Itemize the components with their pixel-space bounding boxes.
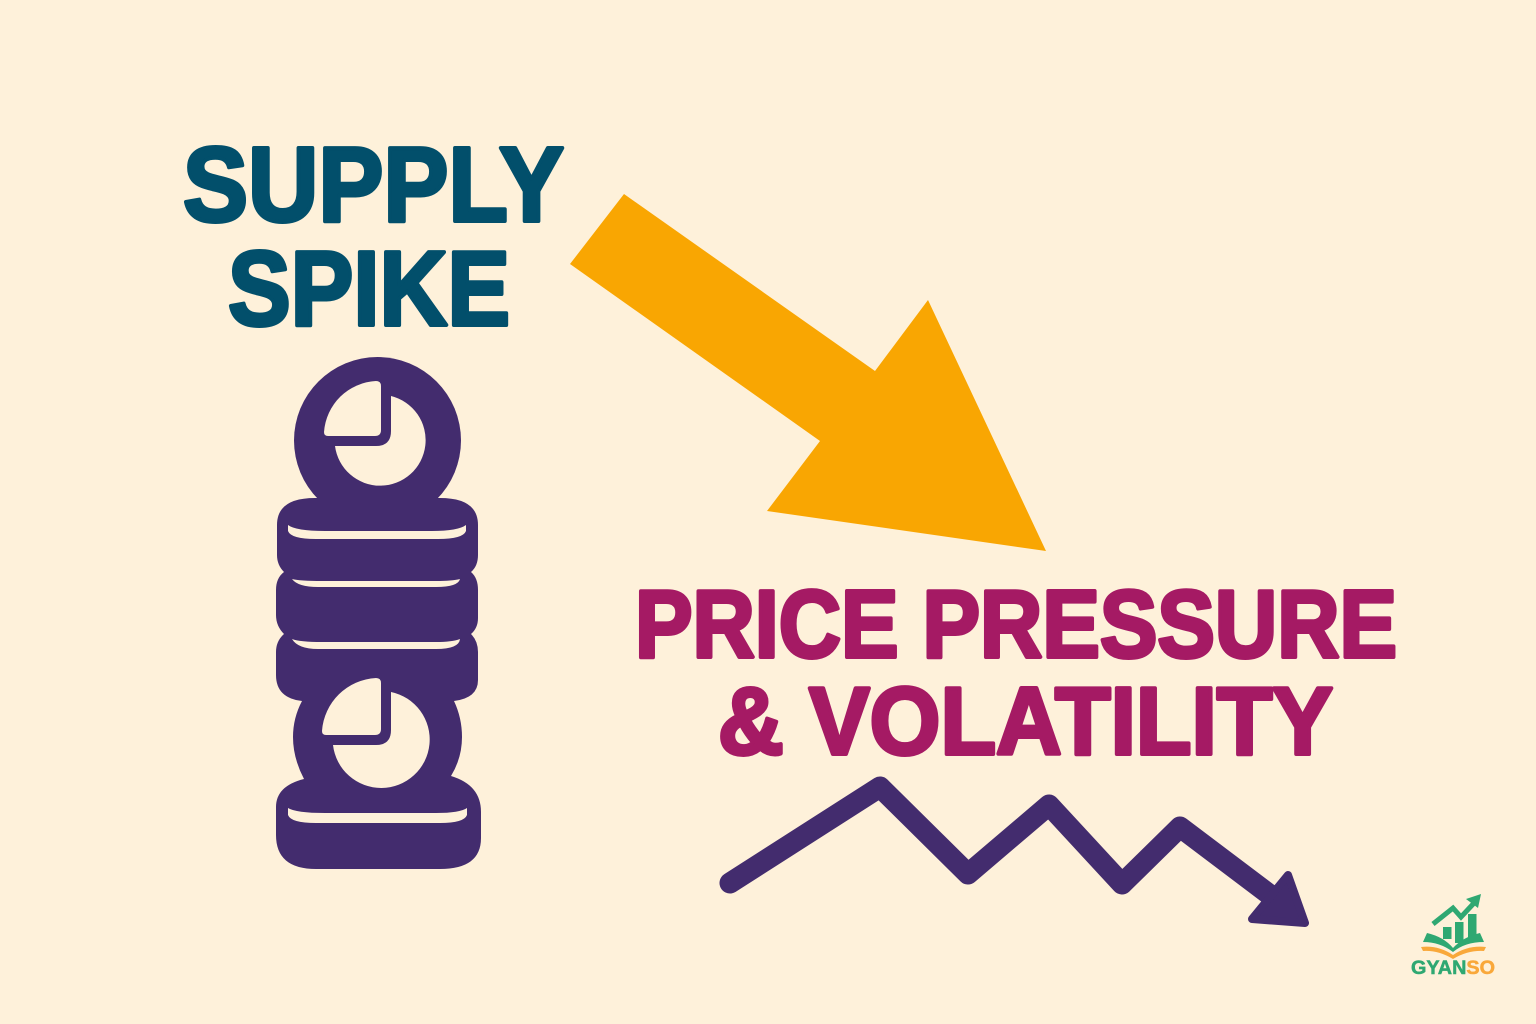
logo open book	[1423, 933, 1484, 952]
heading: price pressure and volatility	[635, 571, 1397, 775]
logo wordmark: GYANSO	[1411, 958, 1495, 979]
heading: supply spike: SPIKE	[228, 230, 510, 348]
heading: price pressure and volatility: & VOLATILITY	[718, 668, 1333, 775]
heading: supply spike: SUPPLY	[183, 126, 564, 244]
arrow: large orange downward arrow	[570, 194, 1046, 551]
logo: gyanso	[1411, 894, 1495, 979]
heading: supply spike	[183, 126, 564, 348]
heading: price pressure and volatility: PRICE PRESSURE	[635, 571, 1397, 678]
upper coin circle	[294, 357, 461, 524]
stacked discs and lower coin silhouette	[276, 498, 481, 869]
logo bars	[1443, 914, 1476, 943]
disc highlight slits	[288, 525, 467, 823]
chart line: falling zigzag price arrow	[730, 787, 1305, 923]
icon: stack of coins with pie charts	[276, 357, 481, 869]
lower pie chart cutout	[322, 678, 430, 788]
logo growth arrow	[1433, 894, 1481, 924]
upper pie chart cutout	[324, 381, 426, 486]
